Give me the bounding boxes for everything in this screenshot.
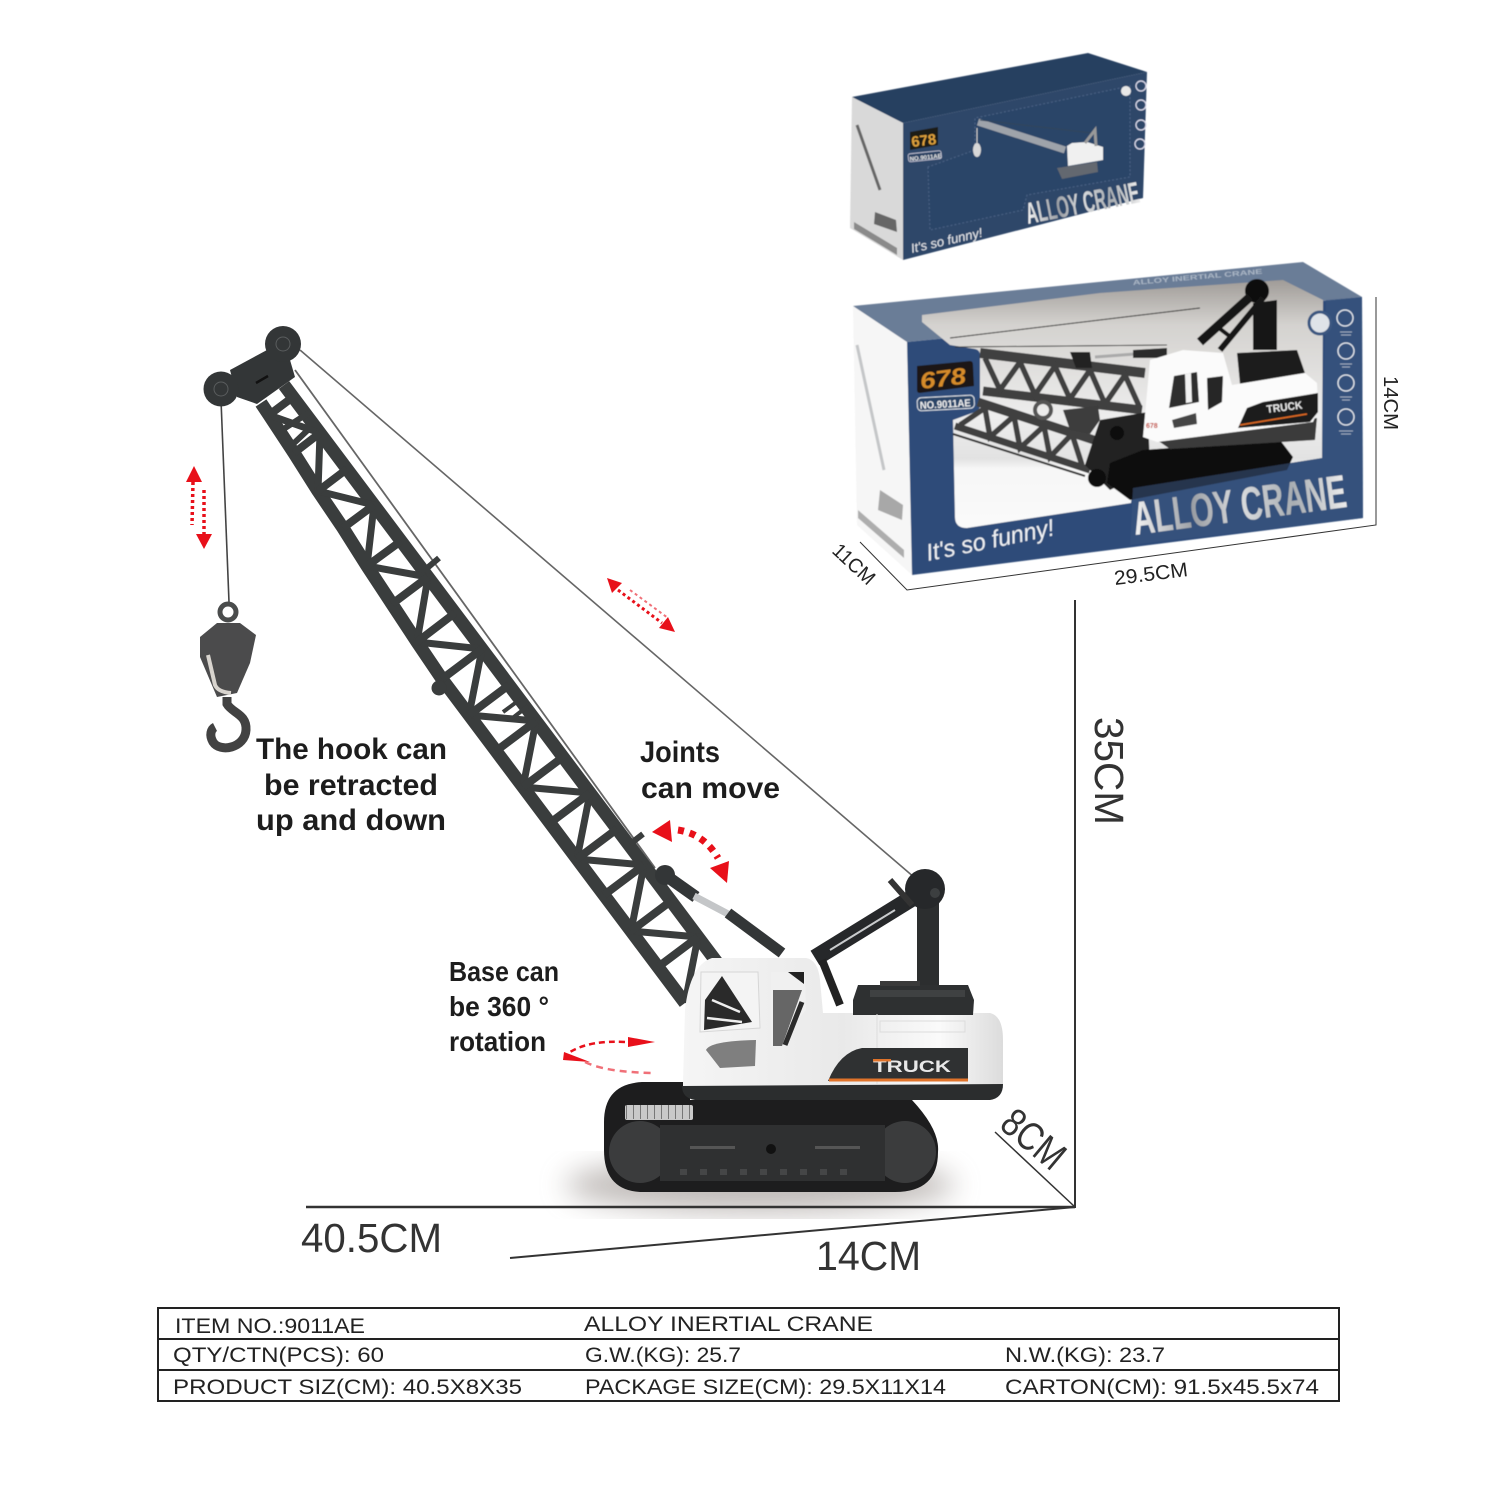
small product box: NO.9011AE [910, 154, 942, 163]
feature icons [1309, 310, 1354, 434]
crane boom lattice [261, 385, 725, 1003]
table text: PACKAGE SIZE(CM): 29.5X11X14 [585, 1376, 946, 1399]
table text: QTY/CTN(PCS): 60 [173, 1344, 384, 1367]
panel behind name [1130, 297, 1363, 545]
callout: base: be 360 ° [449, 991, 549, 1022]
slogan: It's so funny! [924, 514, 1057, 567]
small product box: ALLOY CRANE [1023, 177, 1142, 231]
boom head with pulleys [204, 326, 301, 406]
shadow under crane [565, 1157, 955, 1213]
678 logo: NO.9011AE [920, 397, 971, 412]
box crane tracks [1107, 440, 1293, 500]
callout: base: Base can [449, 956, 559, 987]
callout: base [449, 956, 559, 1057]
box dimension lines and labels: 29.5CM [1113, 559, 1189, 590]
box front panel [907, 297, 1363, 575]
joint arrows [652, 820, 729, 883]
engine vent lines [877, 1014, 965, 1084]
table text: N.W.(KG): 23.7 [1005, 1344, 1165, 1367]
truck panel [828, 1048, 968, 1081]
callout: joints [640, 736, 780, 805]
hook block [200, 604, 256, 748]
678 logo: 678 [918, 363, 968, 394]
small product box: It's so funny! [909, 225, 984, 256]
mast and A-frame [815, 869, 945, 1005]
box dimension lines and labels: 14CM [1379, 376, 1401, 430]
callout: hook [256, 733, 447, 837]
box dimension lines and labels [828, 297, 1401, 590]
box window opening [922, 280, 1323, 528]
table text [173, 1313, 1319, 1399]
cab front window [700, 972, 760, 1068]
crane dimension labels: 40.5CM [301, 1215, 442, 1261]
table text: CARTON(CM): 91.5x45.5x74 [1005, 1376, 1319, 1399]
crane in box: 678 [1146, 423, 1158, 430]
crane dimension labels: 14CM [816, 1233, 921, 1279]
table text: ITEM NO.:9011AE [175, 1315, 365, 1338]
spec table [158, 1308, 1339, 1401]
crane cables [221, 350, 915, 878]
large product box: ALLOY INERTIAL CRANE [1133, 269, 1263, 287]
table text: ALLOY INERTIAL CRANE [584, 1313, 873, 1336]
box left side panel [853, 306, 912, 575]
cable arrows [607, 578, 675, 632]
product dimension lines [306, 600, 1075, 1258]
product name: ALLOY CRANE [1129, 464, 1349, 545]
small product box [850, 53, 1147, 260]
rotation arrows [563, 1037, 655, 1073]
lower boom [953, 402, 1100, 476]
callout: hook: up and down [256, 804, 446, 837]
callout: hook: The hook can [256, 733, 447, 766]
callout: hook: be retracted [264, 769, 438, 802]
small product box: 678 [910, 131, 937, 151]
hook arrows [186, 466, 212, 549]
crane dimension labels: 35CM [1086, 717, 1132, 825]
callout: joints: can move [641, 772, 780, 805]
upper boom [980, 353, 1145, 410]
callout: joints: Joints [640, 736, 720, 769]
callout: base: rotation [449, 1026, 546, 1057]
truck panel: TRUCK [873, 1057, 952, 1076]
table text: G.W.(KG): 25.7 [585, 1344, 741, 1367]
crane dimension labels [301, 717, 1132, 1279]
boom joint knobs [426, 558, 643, 844]
crane body and cab [682, 958, 1003, 1100]
crane in box [953, 279, 1318, 500]
table text: PRODUCT SIZ(CM): 40.5X8X35 [173, 1376, 522, 1399]
hydraulic piston [655, 865, 782, 953]
large product box [853, 262, 1363, 575]
box crane mast [1200, 279, 1277, 350]
box dimension lines and labels: 11CM [828, 540, 879, 590]
crane in box: TRUCK [1266, 400, 1303, 416]
box top panel [853, 262, 1362, 342]
crane dimension labels: 8CM [992, 1100, 1074, 1179]
cab side window [771, 972, 806, 1047]
engine cover block [853, 981, 974, 1015]
678 logo [917, 361, 975, 412]
crawler tracks [604, 1082, 938, 1192]
